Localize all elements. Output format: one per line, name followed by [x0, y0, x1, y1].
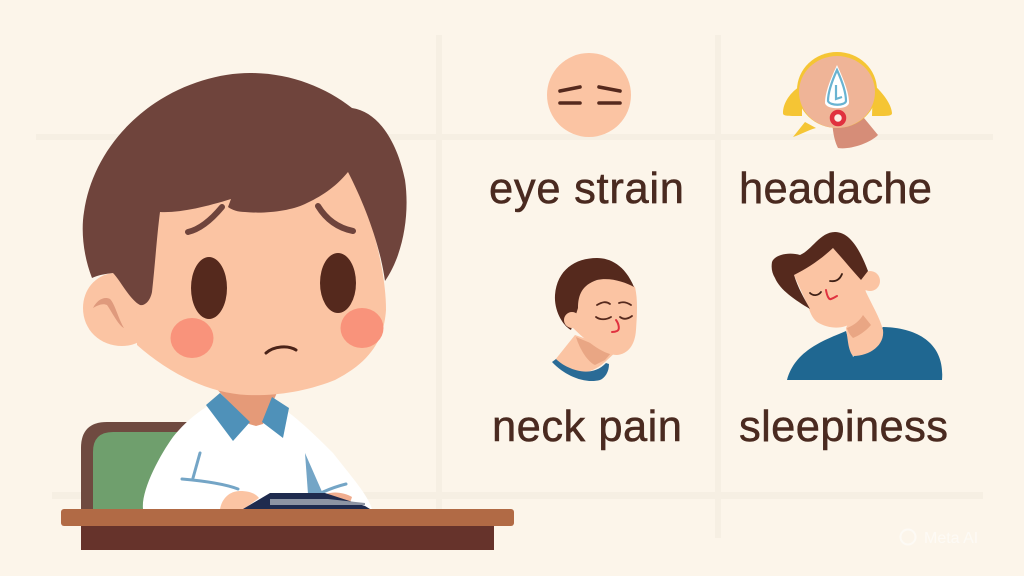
eyebrows	[188, 206, 353, 232]
chair	[81, 422, 190, 509]
label: headache: headache	[739, 165, 932, 213]
cheeks	[170, 308, 384, 358]
icon: headache	[783, 52, 892, 148]
face	[137, 150, 386, 395]
neck	[214, 386, 280, 426]
shirt	[143, 406, 372, 509]
desk	[61, 509, 514, 550]
eyes	[191, 253, 356, 319]
icon: neck pain	[552, 258, 637, 381]
label: eye strain: eye strain	[489, 165, 684, 213]
hand	[220, 491, 259, 509]
mouth	[266, 347, 296, 353]
icon: sleepiness	[772, 232, 942, 380]
label: sleepiness: sleepiness	[739, 403, 948, 451]
hair	[83, 73, 407, 305]
icon: eye strain face	[547, 53, 631, 137]
illustration: tired student at desk	[61, 73, 514, 550]
ear	[83, 273, 150, 346]
watermark	[900, 530, 978, 547]
label: neck pain: neck pain	[492, 403, 682, 451]
watermark: Meta AI	[924, 530, 978, 547]
collar	[206, 393, 289, 441]
book	[243, 493, 370, 509]
